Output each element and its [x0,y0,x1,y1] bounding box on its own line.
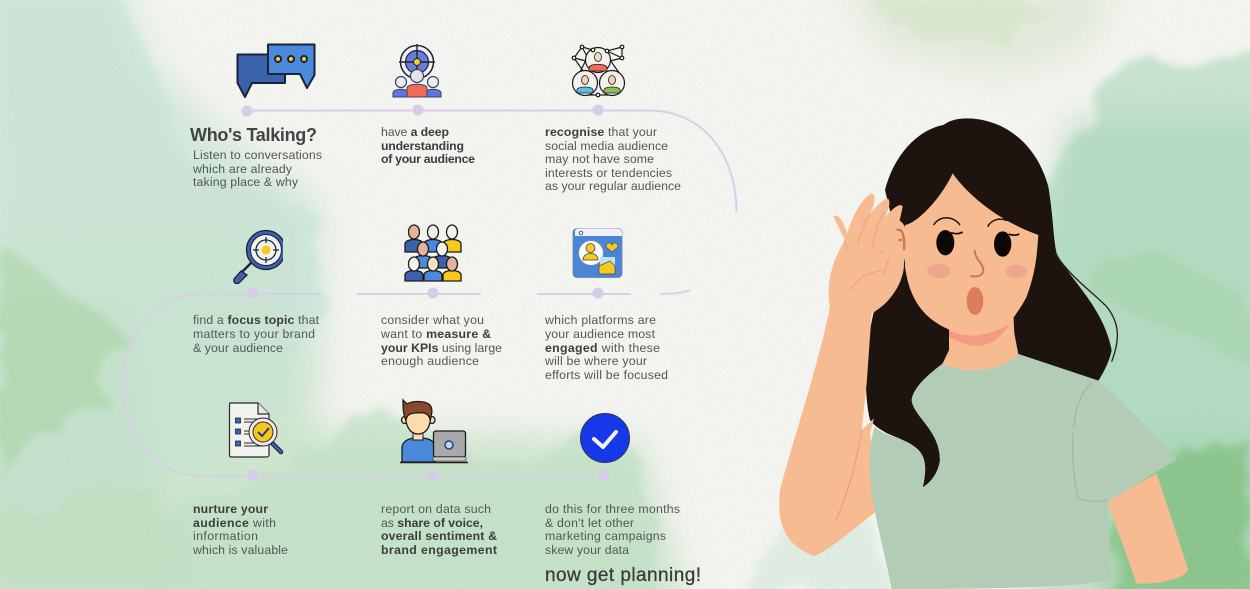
step 6: platforms [544,228,668,382]
icon: speech bubbles [238,44,314,97]
text block: measure: want to measure & [380,327,491,341]
timeline dot 3 [592,104,604,116]
timeline dot 6 [592,288,604,298]
text block: three months: do this for three months [545,502,680,516]
text block: platforms: efforts will be focused [545,368,668,382]
icon: crowd of people [405,225,461,281]
text block: deep understanding: of your audience [381,152,475,166]
closing line: now get planning: now get planning! [545,565,701,586]
timeline dot 5 [428,288,438,298]
icon: target audience [393,44,441,97]
neck [943,313,1018,370]
text block: recognise: may not have some [545,152,654,166]
text block: report: report on data such [381,502,491,516]
text block: platforms: which platforms are [544,313,656,327]
timeline dot 2 [412,104,424,116]
step 3: recognise [545,45,681,193]
text block: focus topic [193,313,320,355]
text block: report: brand engagement [381,543,497,557]
process path connector [123,110,736,476]
text block: nurture: audience with [193,516,276,530]
timeline dot 8 [428,470,438,480]
icon: social network [572,45,624,97]
step 9: three months [545,414,701,586]
hand creases [845,212,889,291]
step 5: measure [380,225,502,368]
step 1: who's talking [190,44,322,189]
text block: focus topic: find a focus topic that [193,313,320,327]
sleeve seam [1072,383,1107,501]
inner ear [897,230,904,250]
timeline dot 7 [248,470,258,480]
ear [887,220,907,265]
text block: recognise: social media audience [545,139,668,153]
icon: man at laptop [400,400,468,462]
timeline dot 9 [598,470,610,480]
text block: platforms: your audience most [545,327,656,341]
text block: three months: marketing campaigns [545,529,666,543]
icon: check badge [580,414,630,462]
text block: measure: consider what you [381,313,484,327]
text block: recognise: interests or tendencies [545,166,672,180]
hair strand [1055,253,1117,362]
eyes [936,230,1019,257]
step 7: nurture [192,403,288,557]
text block: listen: Listen to conversations [193,148,322,162]
text block: deep understanding: understanding [381,139,464,153]
icon: social profile window [573,228,622,278]
text block: listen: which are already [192,162,293,176]
step 8: report [381,400,497,557]
text block: focus topic: & your audience [193,341,283,355]
eyebrows [934,218,1007,227]
right arm [1107,473,1188,584]
text block: report: as share of voice, [381,516,483,530]
icon: document with magnifier [230,403,281,457]
timeline dot 1 [242,106,252,116]
step 4: focus topic [193,230,320,355]
timeline dot 4 [248,288,258,298]
face [905,173,1038,335]
text block: deep understanding [381,125,475,166]
text block: nurture [192,502,288,557]
text block: recognise: as your regular audience [545,179,681,193]
text block: platforms: will be where your [544,354,647,368]
hair [866,118,1112,487]
nose [971,251,983,276]
heading: who's talking: Who's Talking? [190,125,317,145]
text block: three months [545,502,680,557]
text block: three months: skew your data [545,543,629,557]
text block: deep understanding: have a deep [381,125,449,139]
text block: measure [380,313,502,368]
text block: recognise: recognise that your [545,125,657,139]
text block: focus topic: matters to your brand [193,327,315,341]
text block: report [381,502,497,557]
shirt [869,354,1177,589]
text block: measure: enough audience [381,354,479,368]
neck shadow [949,315,1013,346]
text block: nurture: information [193,529,258,543]
text block: nurture: nurture your [193,502,268,516]
text block: report: overall sentiment & [381,529,497,543]
text block: measure: your KPIs using large [381,341,502,355]
text block: three months: & don't let other [545,516,634,530]
illustration: woman listening [779,118,1188,589]
text block: listen [192,148,322,189]
text block: nurture: which is valuable [192,543,288,557]
raised arm and hand [779,193,904,556]
text block: recognise [545,125,681,193]
content group [190,44,701,586]
text block: platforms: engaged with these [545,341,660,355]
text block: platforms [544,313,668,382]
step 2: audience [381,44,475,166]
text block: listen: taking place & why [193,175,299,189]
arm crease [836,430,862,520]
icon: magnifier target [234,230,286,284]
cheeks [927,264,1027,278]
mouth [967,287,983,315]
